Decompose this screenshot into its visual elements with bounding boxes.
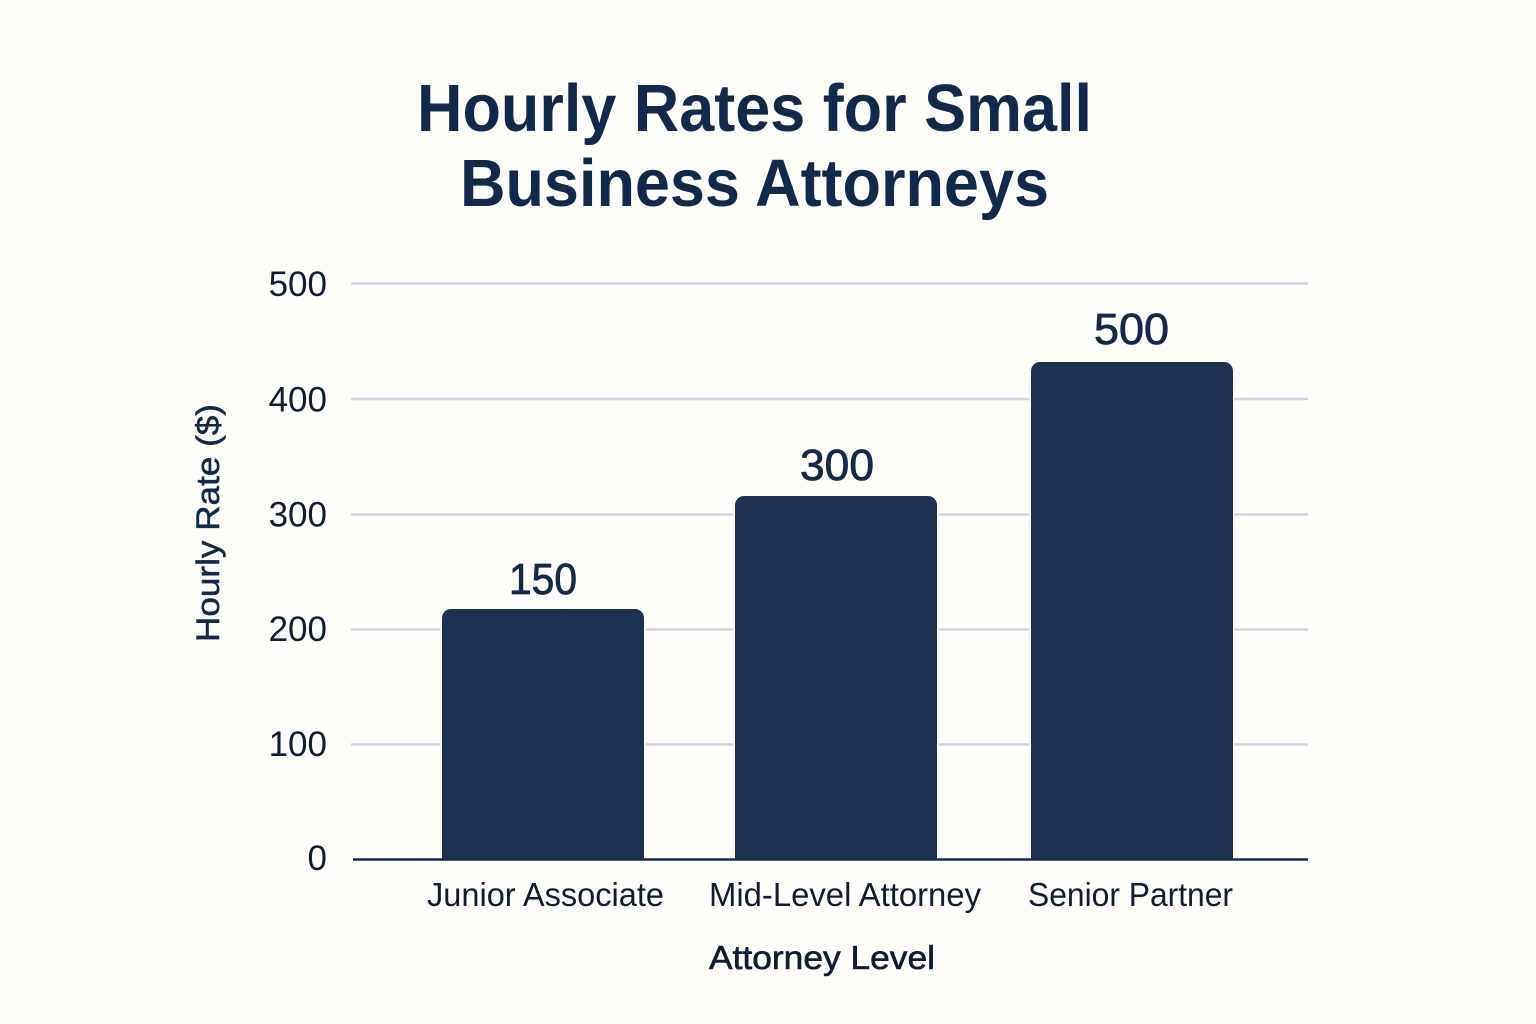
y-axis title: Hourly Rate ($) <box>190 404 226 642</box>
y-axis tick labels <box>269 265 327 878</box>
title: Business Attorneys <box>460 146 1049 221</box>
bar: Junior Associate <box>442 609 644 859</box>
y-axis tick labels: 500 <box>269 265 327 304</box>
x-axis category labels: Junior Associate <box>427 876 664 913</box>
y-axis tick labels: 100 <box>269 725 327 764</box>
y-axis tick labels: 0 <box>308 839 327 878</box>
y-axis tick labels: 200 <box>269 610 327 649</box>
bar: Senior Partner <box>1031 362 1233 859</box>
y-axis tick labels: 300 <box>269 496 327 534</box>
x-axis title: Attorney Level <box>709 939 935 976</box>
x-axis category labels: Senior Partner <box>1028 876 1233 913</box>
x-axis line <box>353 858 1308 861</box>
value labels: 300 <box>800 441 874 490</box>
y-axis tick labels: 400 <box>269 380 327 420</box>
x-axis category labels: Mid-Level Attorney <box>709 876 981 913</box>
title <box>417 71 1092 221</box>
title: Hourly Rates for Small <box>417 71 1092 146</box>
value labels <box>509 305 1169 604</box>
bar: Mid-Level Attorney <box>735 496 937 859</box>
value labels: 150 <box>509 555 577 604</box>
x-axis category labels <box>427 876 1233 913</box>
value labels: 500 <box>1094 305 1169 354</box>
